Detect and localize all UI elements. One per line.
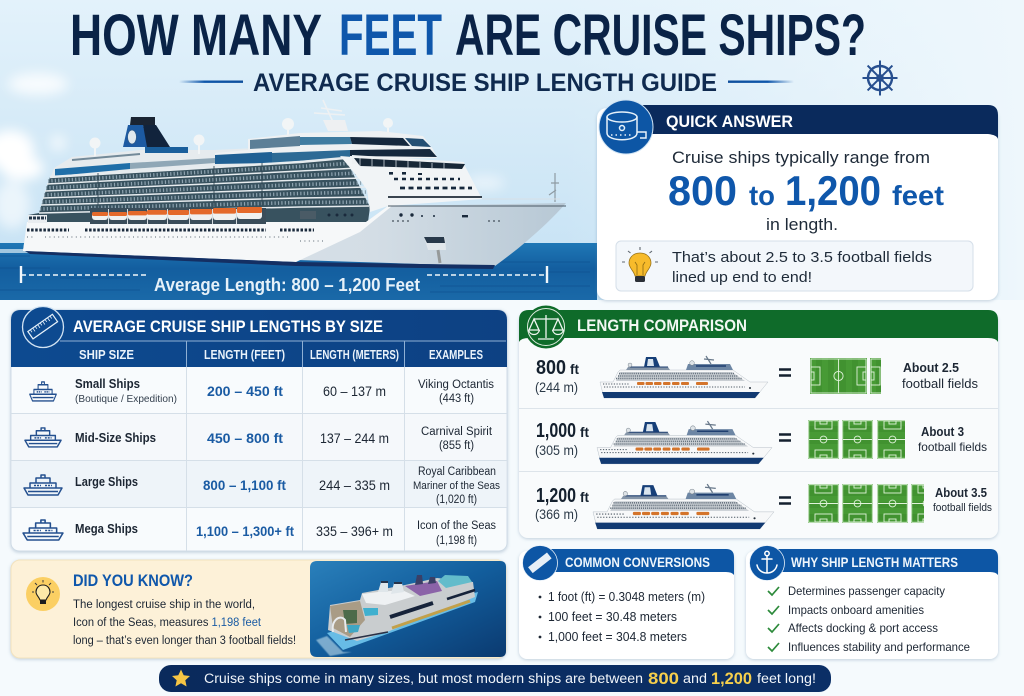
conversions list bbox=[539, 589, 705, 644]
row: 1,200 ft comparison: About 3.5 bbox=[935, 485, 987, 500]
panel: common conversions bbox=[519, 546, 734, 659]
icon: yellow bulb badge bbox=[26, 577, 60, 611]
quick answer range: 800 bbox=[668, 167, 737, 214]
quick answer range: 1,200 bbox=[785, 167, 881, 214]
panel: average lengths table: AVERAGE CRUISE SHIP LENGTHS BY SIZE bbox=[73, 317, 383, 336]
row: mid-size ships: (855 ft) bbox=[439, 440, 474, 452]
panel: common conversions: COMMON CONVERSIONS bbox=[565, 554, 710, 570]
balcony decks bbox=[28, 158, 370, 224]
reasons checklist bbox=[768, 584, 970, 654]
row: 1,200 ft comparison: football fields bbox=[933, 502, 992, 514]
row: large ships: Large Ships bbox=[75, 475, 138, 489]
aerial photo of Icon of the Seas bbox=[310, 561, 506, 657]
table column headers bbox=[79, 348, 483, 362]
footer banner: 800 bbox=[648, 669, 679, 688]
funnel bbox=[123, 125, 148, 147]
panel: did you know bbox=[11, 560, 506, 658]
icon: star bbox=[172, 670, 190, 686]
reasons checklist: Influences stability and performance bbox=[788, 640, 970, 654]
row: 1,000 ft comparison: ft bbox=[580, 424, 589, 440]
title: HOW MANY bbox=[70, 3, 322, 68]
comparison heading bar bbox=[519, 310, 998, 342]
row: small ships: Viking Octantis bbox=[418, 379, 494, 391]
table column headers: EXAMPLES bbox=[429, 348, 483, 362]
row: large ships: Royal Caribbean bbox=[418, 466, 496, 478]
row: 1,200 ft comparison bbox=[535, 484, 992, 529]
why heading bar bbox=[767, 549, 998, 575]
row: mid-size ships: 137 – 244 m bbox=[320, 431, 389, 446]
row: 1,000 ft comparison: About 3 bbox=[921, 424, 964, 439]
row: large ships: 244 – 335 m bbox=[319, 478, 390, 493]
row: mega ships: Icon of the Seas bbox=[417, 520, 496, 532]
row: large ships: (1,020 ft) bbox=[436, 494, 477, 506]
row: 800 ft comparison: About 2.5 bbox=[903, 360, 959, 375]
row: 1,000 ft comparison: 1,000 bbox=[536, 420, 576, 442]
row: 1,000 ft comparison: football fields bbox=[918, 440, 987, 454]
did you know text: long – that’s even longer than 3 football fields! bbox=[73, 633, 296, 647]
table heading bar bbox=[11, 310, 507, 367]
conversions list: 1,000 feet = 304.8 meters bbox=[548, 629, 687, 644]
row: 1,000 ft comparison bbox=[535, 420, 987, 464]
table column headers: SHIP SIZE bbox=[79, 348, 134, 362]
panel: length comparison bbox=[519, 306, 998, 538]
bridge wing bbox=[352, 155, 465, 168]
row: small ships: 60 – 137 m bbox=[323, 384, 386, 399]
footer banner: and bbox=[683, 671, 707, 686]
did you know text: Icon of the Seas, measures 1,198 feet bbox=[73, 615, 262, 629]
panel: why ship length matters bbox=[746, 546, 998, 659]
icon: tape measure bbox=[599, 100, 653, 154]
aft sun decks bbox=[50, 146, 300, 179]
row: small ships: 200 – 450 ft bbox=[207, 383, 283, 399]
quick answer range bbox=[668, 167, 944, 214]
row: mega ships: 335 – 396+ m bbox=[316, 524, 393, 539]
upper deck block bbox=[215, 131, 437, 163]
row: mega ships: 1,100 – 1,300+ ft bbox=[196, 523, 294, 539]
quick answer intro text: Cruise ships typically range from bbox=[672, 148, 930, 167]
football fields tip: lined up end to end! bbox=[672, 269, 812, 286]
row: 800 ft comparison bbox=[535, 356, 978, 398]
icon: balance scales bbox=[524, 306, 568, 348]
row: 800 ft comparison: football fields bbox=[902, 377, 978, 391]
did you know text: DID YOU KNOW? bbox=[73, 572, 193, 590]
row: mid-size ships bbox=[25, 426, 493, 452]
row: large ships: 800 – 1,100 ft bbox=[203, 477, 286, 493]
panel: average lengths table bbox=[11, 306, 507, 551]
did you know text: The longest cruise ship in the world, bbox=[73, 597, 255, 611]
row: small ships: Small Ships bbox=[75, 377, 140, 391]
icon: ruler badge bbox=[522, 546, 558, 580]
table row shading bbox=[12, 460, 506, 507]
subtitle with side rules: AVERAGE CRUISE SHIP LENGTH GUIDE bbox=[253, 69, 717, 97]
row: small ships: (Boutique / Expedition) bbox=[75, 393, 177, 405]
quick answer header bbox=[630, 105, 998, 139]
conversions list: 1 foot (ft) = 0.3048 meters (m) bbox=[548, 589, 705, 604]
row: 800 ft comparison: 800 bbox=[536, 357, 566, 379]
conversions heading bar bbox=[540, 549, 734, 575]
panel: quick answer bbox=[597, 100, 998, 300]
quick answer range: feet bbox=[892, 180, 944, 211]
row: 1,200 ft comparison: (366 m) bbox=[535, 506, 578, 522]
radar domes bbox=[90, 118, 393, 156]
white forward superstructure bbox=[340, 156, 482, 212]
icon: light bulb bbox=[622, 247, 658, 282]
footer banner: feet long! bbox=[757, 671, 816, 686]
footer banner: Cruise ships come in many sizes, but most modern ships are between bbox=[204, 671, 643, 686]
title bbox=[70, 3, 866, 68]
stern deck bbox=[28, 215, 47, 223]
did you know text bbox=[73, 572, 296, 647]
table column headers: LENGTH (FEET) bbox=[204, 348, 285, 362]
row: mega ships: Mega Ships bbox=[75, 522, 138, 536]
title: ARE CRUISE SHIPS? bbox=[455, 3, 866, 68]
hull windows bbox=[27, 211, 500, 230]
lifeboats bbox=[90, 207, 266, 224]
row: small ships: (443 ft) bbox=[439, 393, 474, 405]
table column headers: LENGTH (METERS) bbox=[310, 348, 399, 362]
footer banner: 1,200 bbox=[711, 669, 752, 688]
mast and antennas bbox=[314, 100, 560, 202]
football fields tip bbox=[616, 241, 973, 291]
row: mid-size ships: Carnival Spirit bbox=[421, 426, 493, 438]
hero cruise ship bbox=[23, 100, 566, 269]
conversions list: 100 feet = 30.48 meters bbox=[548, 609, 677, 624]
row: mid-size ships: 450 – 800 ft bbox=[207, 430, 283, 446]
row: mega ships: (1,198 ft) bbox=[436, 535, 477, 547]
reasons checklist: Determines passenger capacity bbox=[788, 584, 945, 598]
quick answer range: to bbox=[749, 180, 775, 211]
row: 1,200 ft comparison: ft bbox=[580, 489, 589, 505]
row: large ships: Mariner of the Seas bbox=[413, 480, 500, 492]
row: large ships bbox=[24, 466, 500, 506]
row: small ships bbox=[30, 377, 494, 405]
panel: quick answer: QUICK ANSWER bbox=[666, 113, 793, 131]
row: mega ships bbox=[23, 520, 496, 547]
hero: sky, clouds and sea bbox=[0, 0, 1024, 300]
length marker with label bbox=[21, 266, 547, 295]
panel: why ship length matters: WHY SHIP LENGTH MATTERS bbox=[791, 554, 958, 570]
reasons checklist: Affects docking & port access bbox=[788, 621, 938, 635]
row: 1,000 ft comparison: (305 m) bbox=[535, 442, 578, 458]
length marker with label: Average Length: 800 – 1,200 Feet bbox=[154, 275, 420, 295]
title: FEET bbox=[339, 3, 442, 68]
row: mid-size ships: Mid-Size Ships bbox=[75, 431, 156, 445]
quick answer unit text: in length. bbox=[766, 215, 838, 234]
hull bbox=[23, 203, 566, 266]
row: 1,200 ft comparison: 1,200 bbox=[536, 485, 576, 507]
football fields tip: That’s about 2.5 to 3.5 football fields bbox=[672, 249, 932, 266]
anchor recess bbox=[424, 237, 446, 250]
row: 800 ft comparison: (244 m) bbox=[535, 379, 578, 395]
row: 800 ft comparison: ft bbox=[570, 361, 579, 377]
icon: ship wheel bbox=[862, 60, 898, 96]
waterline stripe bbox=[25, 251, 495, 269]
reasons checklist: Impacts onboard amenities bbox=[788, 603, 924, 617]
panel: length comparison: LENGTH COMPARISON bbox=[577, 316, 747, 335]
icon: ruler bbox=[22, 306, 64, 348]
icon: anchor badge bbox=[750, 546, 784, 580]
footer banner bbox=[159, 665, 831, 692]
